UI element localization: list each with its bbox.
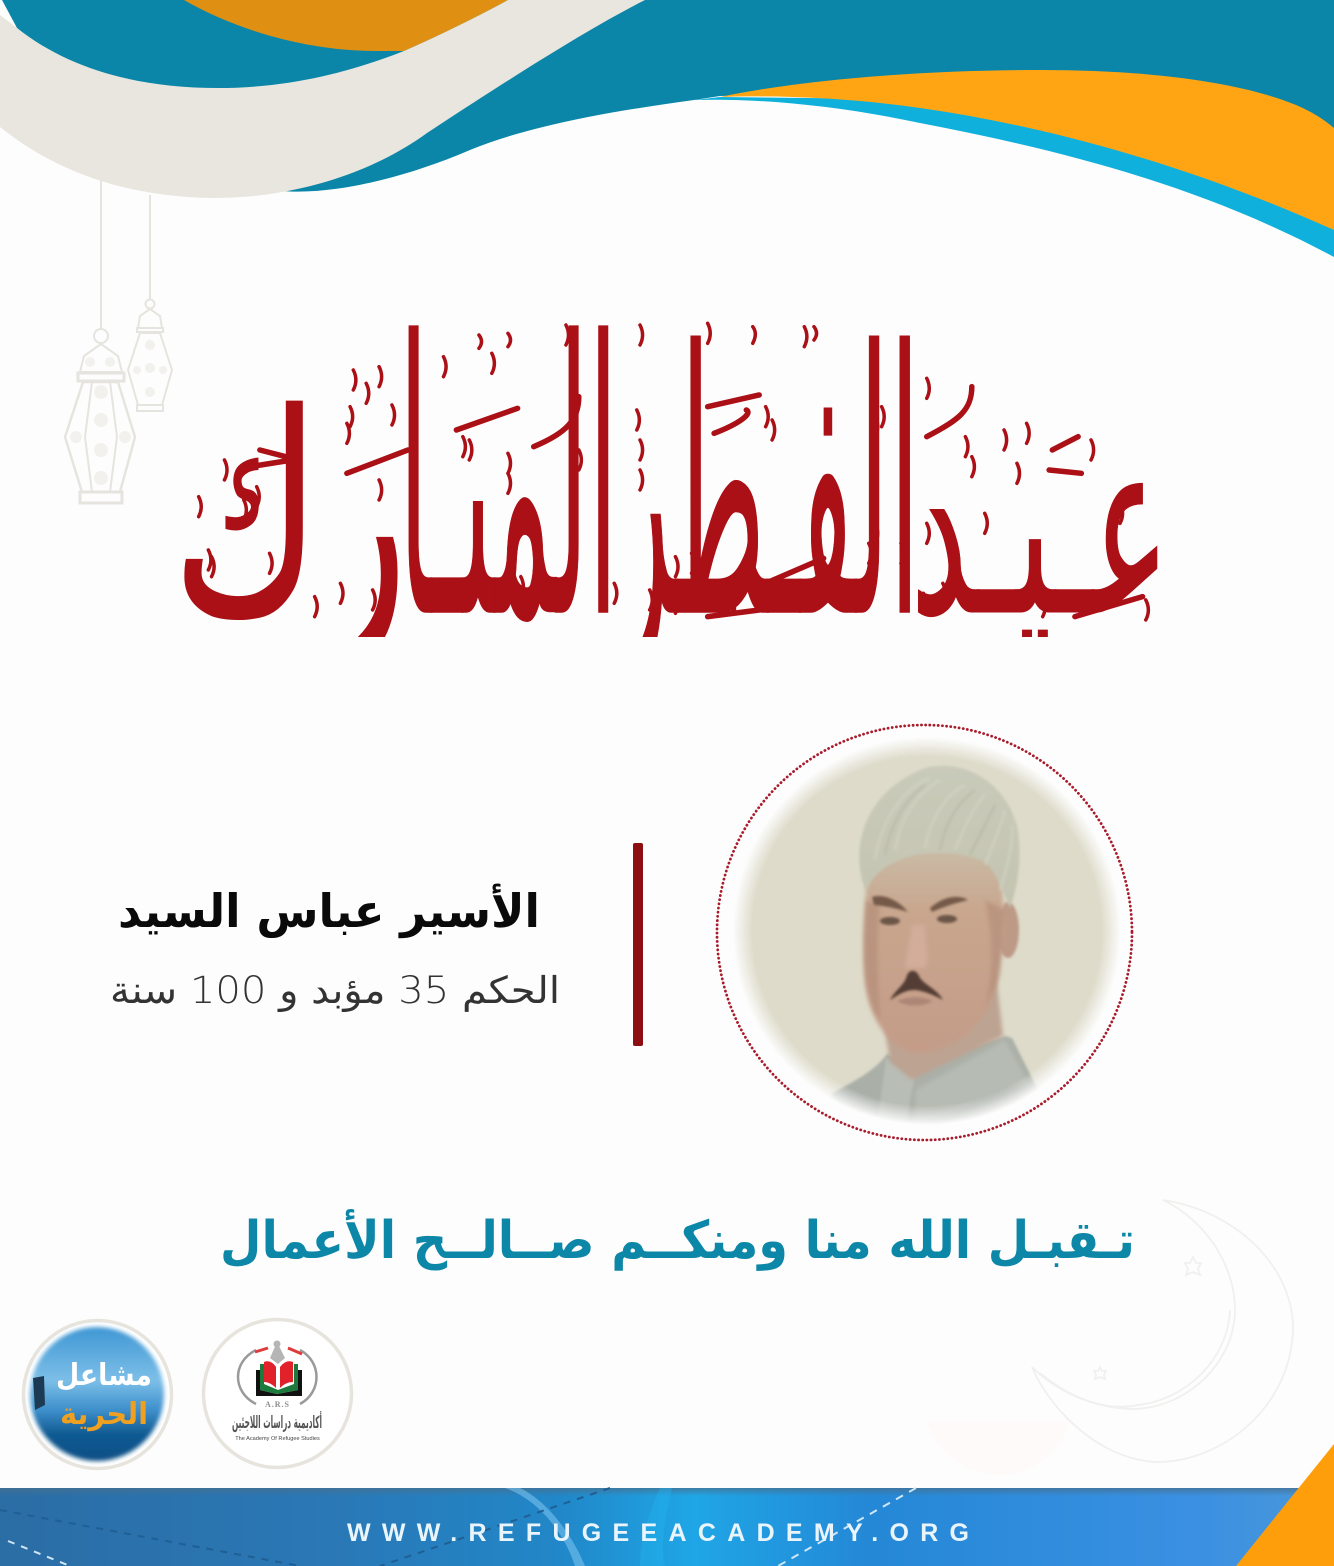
logo: Mashael al-Hurriya bbox=[24, 1320, 172, 1468]
photo background bbox=[736, 740, 1118, 1095]
portrait photo bbox=[736, 740, 1118, 1123]
calligraphy title: Eid al-Fitr Mubarak: الفـطر bbox=[611, 276, 920, 703]
moon star bbox=[1185, 1257, 1201, 1275]
crescent moon decoration bbox=[1032, 1200, 1293, 1462]
divider bar bbox=[633, 843, 643, 1046]
face side shade bbox=[864, 900, 1005, 1020]
face bbox=[864, 850, 1005, 1053]
cream wave bbox=[0, 0, 645, 198]
logo: Mashael al-Hurriya: الحرية bbox=[60, 1397, 148, 1432]
calligraphy ornaments bbox=[199, 323, 1148, 620]
orange wave bbox=[720, 70, 1334, 230]
eyes bbox=[880, 917, 900, 925]
teal wave bbox=[2, 0, 1334, 192]
lips bbox=[897, 997, 933, 1006]
calligraphy title: Eid al-Fitr Mubarak: المبـا bbox=[399, 264, 618, 702]
mustache bbox=[890, 971, 943, 1000]
ear bbox=[997, 902, 1019, 958]
logo: Mashael al-Hurriya: مشاعل bbox=[56, 1358, 152, 1393]
dark orange wave bbox=[184, 0, 508, 51]
logo: Academy of Refugee Studies: A.R.S bbox=[265, 1400, 290, 1409]
emblem arcs bbox=[238, 1350, 316, 1404]
lanterns decoration bbox=[65, 180, 172, 503]
small lantern bbox=[128, 195, 172, 411]
hair bbox=[859, 766, 1020, 908]
website url: WWW.REFUGEEACADEMY.ORG bbox=[347, 1519, 969, 1547]
logo: Academy of Refugee Studies: The Academy Of Refugee Studies bbox=[235, 1436, 320, 1442]
moon star bbox=[1094, 1367, 1106, 1379]
emblem book bbox=[256, 1370, 302, 1396]
neck bbox=[885, 975, 1003, 1080]
portrait frame dotted circle bbox=[717, 725, 1132, 1140]
hair strands bbox=[984, 808, 1002, 890]
cyan ribbon bbox=[694, 97, 1334, 257]
top wave banner bbox=[0, 0, 1334, 257]
logo: Academy of Refugee Studies: أكاديمية دراسات اللاجئين bbox=[232, 1411, 322, 1433]
shirt bbox=[832, 1035, 1036, 1122]
footer bar bbox=[0, 1444, 1334, 1566]
faint pink semicircle bbox=[927, 1422, 1070, 1475]
greeting line: تـقبـل الله منا ومنكــم صــالــح الأعمال bbox=[220, 1208, 1135, 1271]
prisoner name: الأسير عباس السيد bbox=[118, 883, 540, 938]
calligraphy title: Eid al-Fitr Mubarak: رك bbox=[172, 356, 408, 680]
logo: Academy of Refugee Studies bbox=[204, 1320, 352, 1468]
nose shade bbox=[906, 926, 926, 968]
eyebrows bbox=[872, 896, 968, 912]
calligraphy title: Eid al-Fitr Mubarak: عـيـد bbox=[910, 384, 1170, 671]
sentence text: الحكم 35 مؤبد و 100 سنة bbox=[110, 969, 560, 1013]
footer dashes bbox=[8, 1541, 70, 1566]
orange corner bbox=[1236, 1444, 1334, 1566]
calligraphy title: Eid al-Fitr Mubarak bbox=[184, 322, 1158, 637]
large lantern bbox=[65, 180, 135, 503]
footer light swoosh bbox=[505, 1488, 585, 1566]
